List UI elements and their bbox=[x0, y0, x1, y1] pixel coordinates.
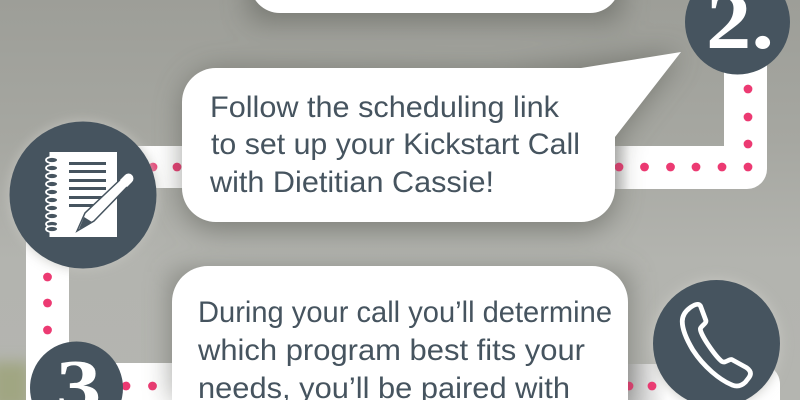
icon: phone bbox=[653, 280, 780, 400]
badge: step 3 bbox=[30, 342, 124, 400]
badge: step 2 bbox=[685, 0, 790, 74]
text: step 3 bbox=[197, 296, 612, 400]
text: step 3: During your call you’ll determine bbox=[198, 296, 612, 329]
bubble: step 2 bbox=[182, 52, 681, 222]
text: step 2: to set up your Kickstart Call bbox=[211, 128, 580, 161]
bubble: step 3 bbox=[172, 266, 628, 400]
bubble shadows bbox=[172, 0, 681, 400]
connector path: step 2 to notebook bbox=[600, 60, 767, 189]
connector path: notebook to step 3 bbox=[26, 146, 190, 400]
connector path: step 3 to phone bbox=[100, 363, 780, 400]
icon: notebook and pencil bbox=[10, 122, 156, 268]
text: step 2: Follow the scheduling link bbox=[210, 91, 560, 124]
text: step 2: with Dietitian Cassie! bbox=[209, 166, 494, 199]
bubble: step 1 bottom bbox=[250, 0, 620, 13]
text: step 3: which program best fits your bbox=[197, 334, 585, 367]
text: step 2 bbox=[209, 91, 580, 199]
